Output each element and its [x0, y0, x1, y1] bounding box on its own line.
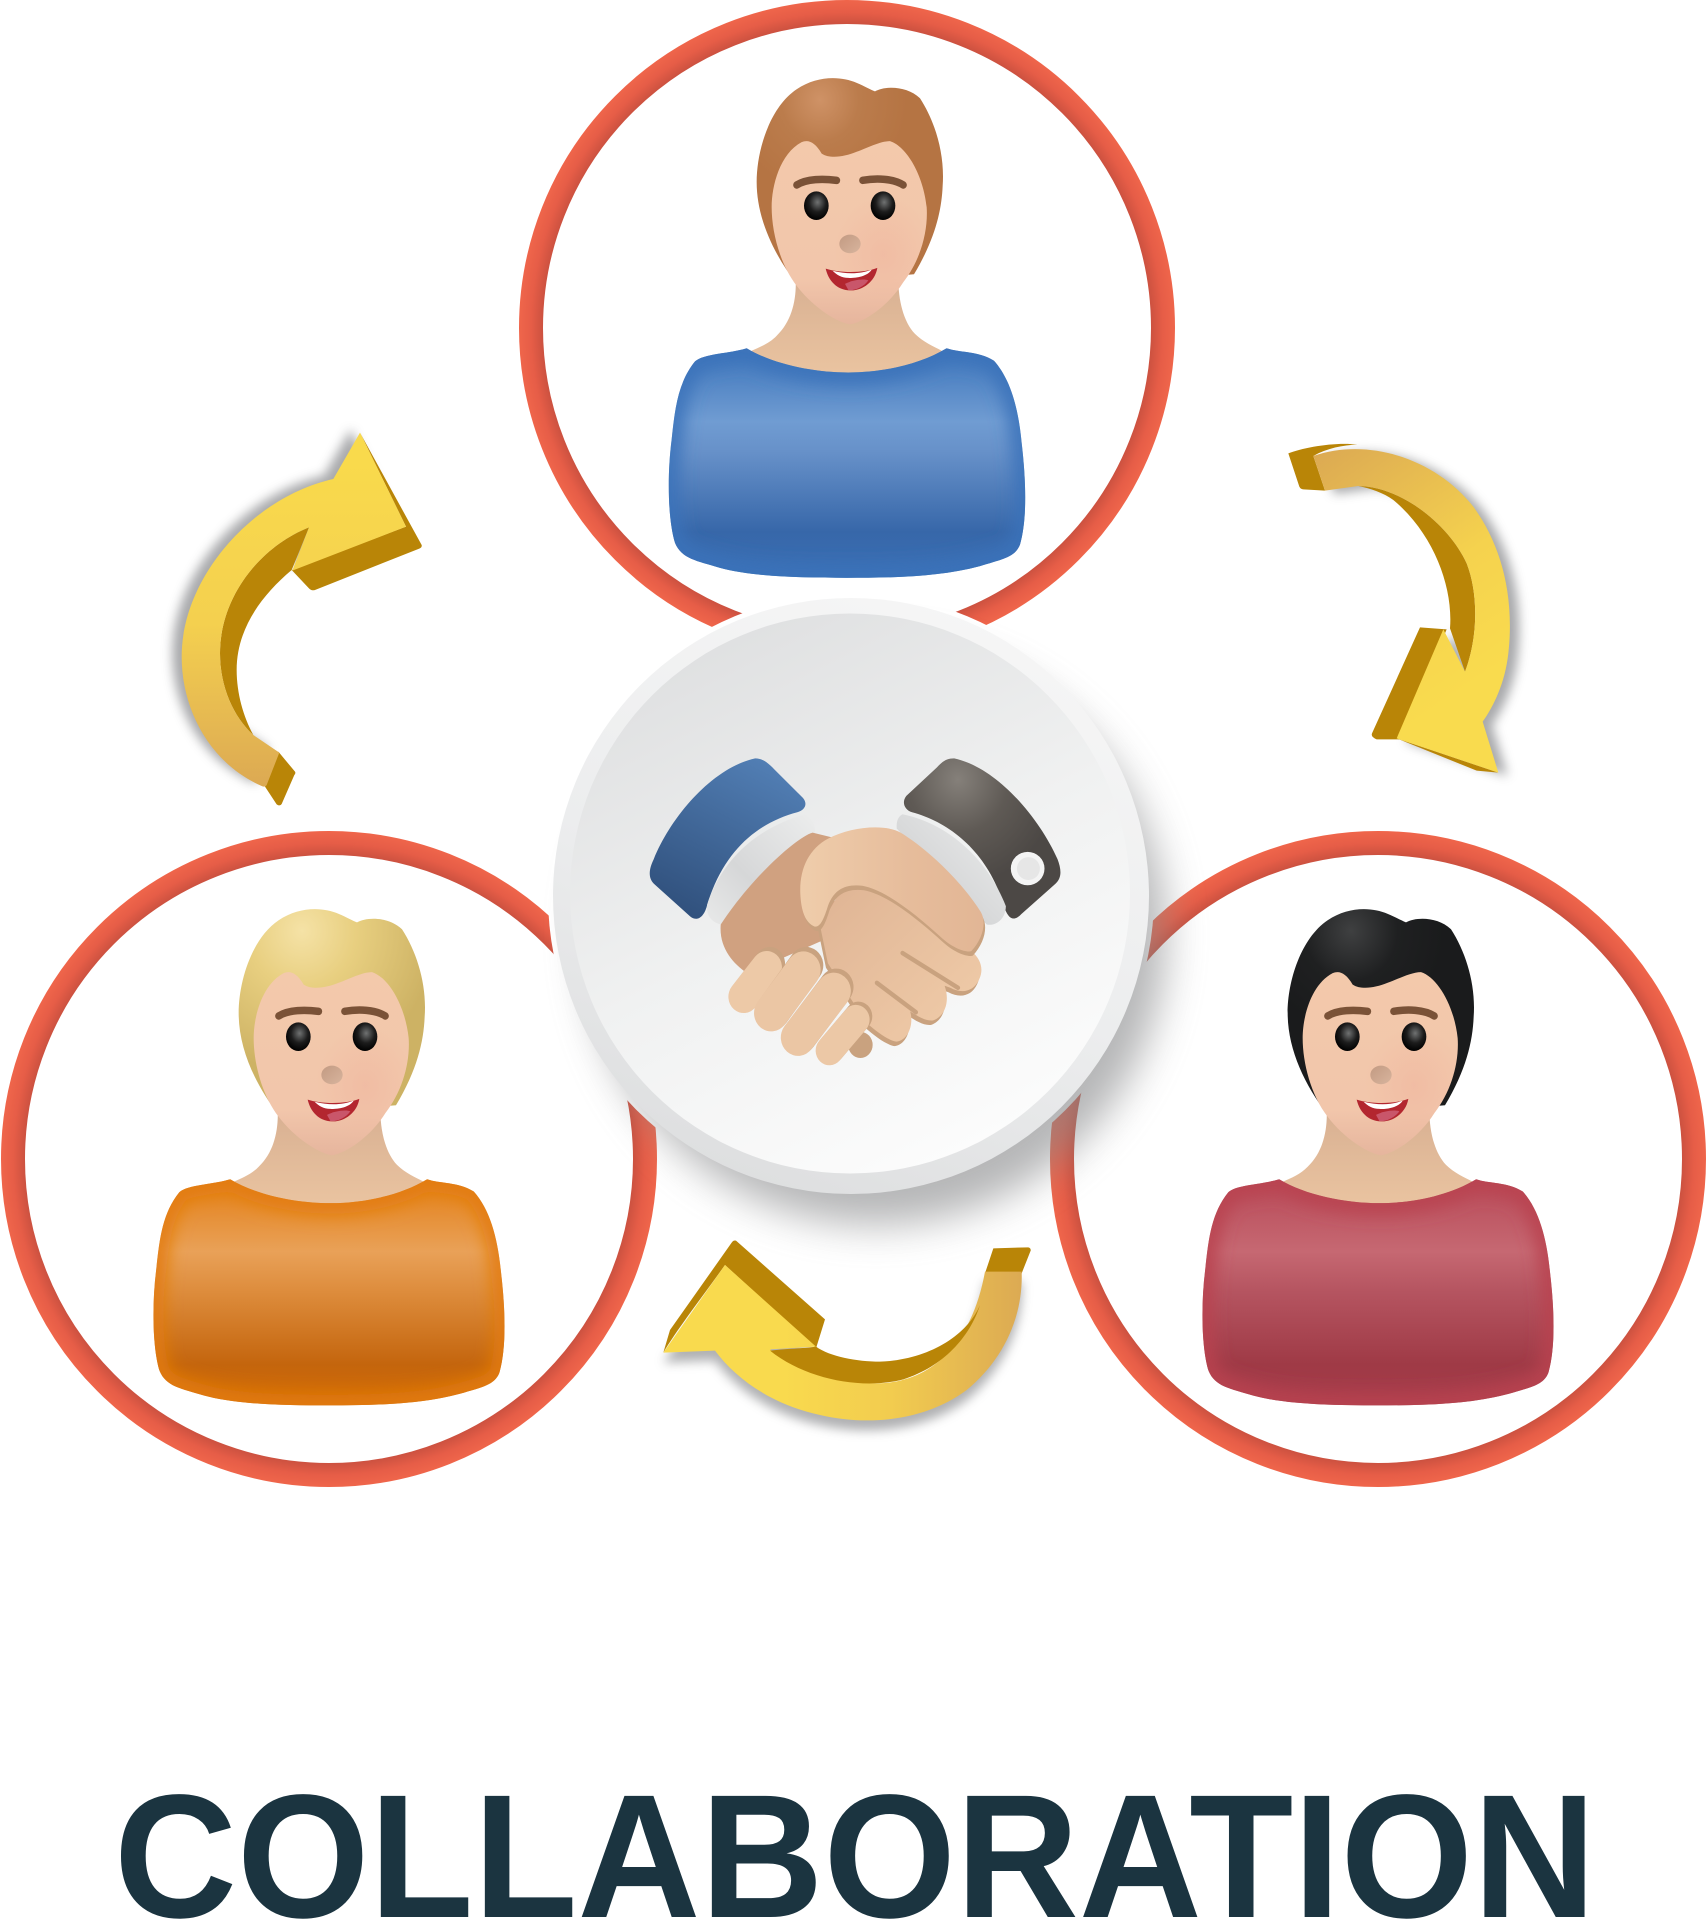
- right hand palm and fingers: [818, 886, 981, 1058]
- arrow: bottom, curving left to the left person: [663, 1241, 1031, 1430]
- ring: left person: [13, 843, 645, 1475]
- ring: right person: [1062, 843, 1694, 1475]
- central disc with drop shadow: [548, 593, 1166, 1225]
- thumb and back of right hand: [800, 827, 985, 956]
- icon: handshake: [650, 758, 1060, 1058]
- shirt cuffs: [707, 814, 1006, 925]
- left hand fingers: [744, 963, 859, 1051]
- right sleeve cuff: grey with button: [904, 758, 1060, 919]
- left sleeve cuff: blue: [650, 758, 805, 919]
- ring: top person: [531, 12, 1163, 644]
- person: top, brown hair, blue shirt: [669, 78, 1025, 578]
- arrow: left, curving up to the top person: [172, 429, 422, 805]
- person: left, blonde hair, orange shirt: [153, 909, 505, 1405]
- person: right, black hair, red shirt: [1202, 909, 1554, 1405]
- arrow: right, curving down to the right person: [1288, 444, 1519, 776]
- left hand back: [721, 833, 836, 973]
